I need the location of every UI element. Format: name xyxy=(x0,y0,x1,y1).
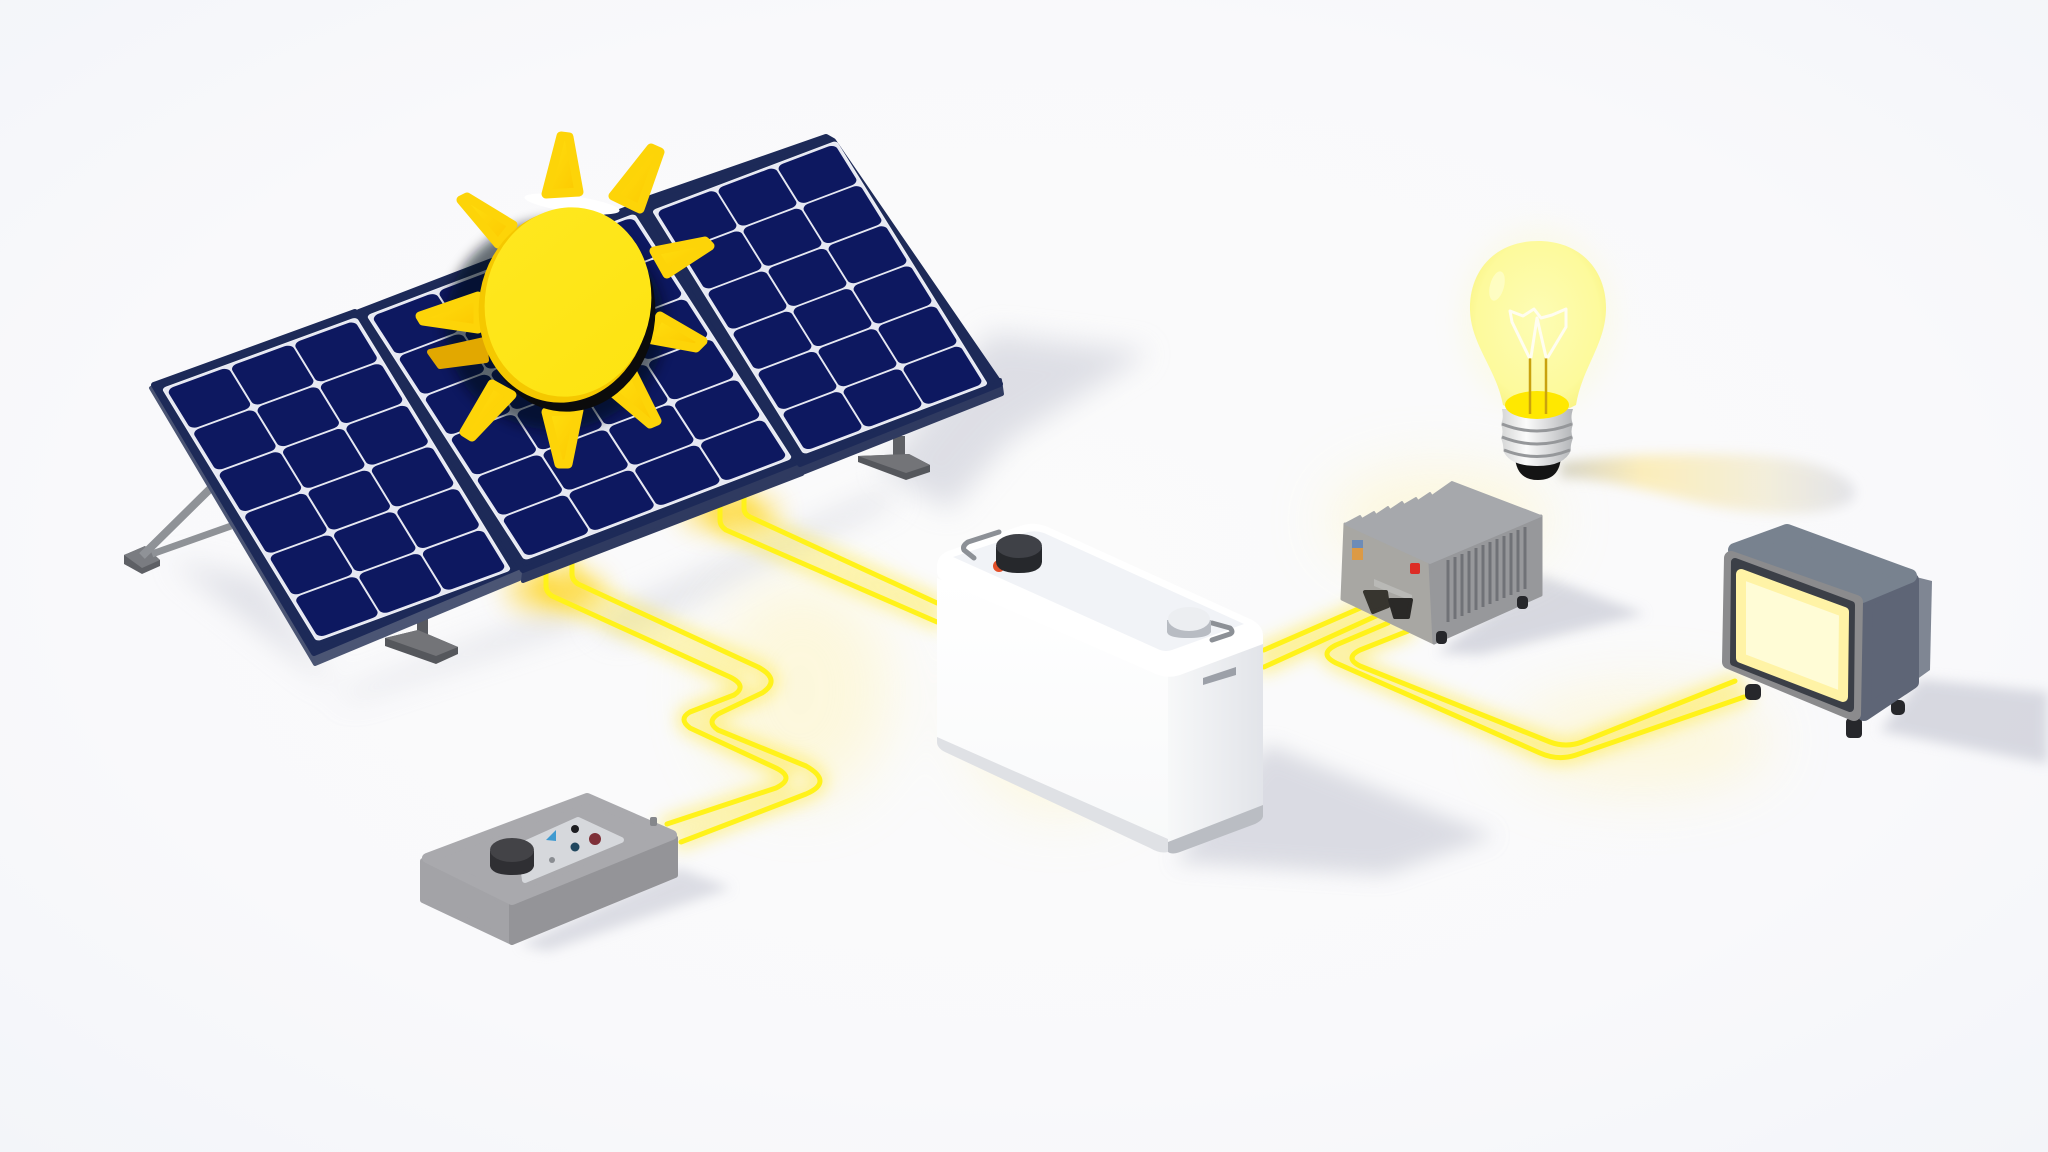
controller left face xyxy=(423,861,512,942)
bulb base glow xyxy=(1505,391,1569,419)
inverter top with serrated edge xyxy=(1345,482,1541,563)
control knob xyxy=(490,838,534,875)
filament xyxy=(1510,309,1566,357)
left stand strut xyxy=(124,486,231,574)
battery lid xyxy=(937,524,1263,677)
battery right face xyxy=(1168,643,1263,852)
sun disc body xyxy=(469,205,671,425)
television xyxy=(1729,531,1932,738)
solar array xyxy=(124,137,1002,664)
wire lines xyxy=(546,498,1744,842)
rear leg xyxy=(858,436,930,480)
glowing wires xyxy=(507,496,1744,842)
tv feet xyxy=(1745,684,1905,738)
panel: middle xyxy=(359,203,802,581)
inverter status light xyxy=(1410,563,1420,574)
ground shadows xyxy=(170,333,2048,951)
control faceplate xyxy=(520,820,621,880)
filament stems xyxy=(1530,357,1546,414)
bulb shadow xyxy=(1560,454,1855,513)
bulb tip xyxy=(1515,456,1561,480)
panel: right xyxy=(642,137,1002,474)
tv inner bezel xyxy=(1734,562,1851,708)
wire exit glows under panels xyxy=(507,496,778,608)
icon: sun xyxy=(420,136,710,464)
inverter vents xyxy=(1448,527,1525,622)
tv back bump xyxy=(1916,577,1932,680)
bulb glow xyxy=(1462,228,1614,412)
inverter feet xyxy=(1436,596,1528,644)
wire glow halo xyxy=(546,498,1744,842)
black terminal xyxy=(993,534,1042,573)
connector nub xyxy=(650,817,657,826)
battery left face xyxy=(937,578,1168,852)
charge controller xyxy=(423,798,675,942)
white terminal xyxy=(1167,607,1211,638)
sun shadow on panel xyxy=(445,220,665,430)
light bulb xyxy=(1462,228,1855,513)
bulb highlight xyxy=(1486,270,1508,302)
tv top xyxy=(1735,531,1910,596)
inverter xyxy=(1342,482,1541,644)
back ray reflection xyxy=(430,340,486,366)
warm light glows on the floor xyxy=(710,470,1770,810)
inverter badge xyxy=(1352,540,1363,560)
tv front bezel xyxy=(1729,558,1856,714)
sun disc face xyxy=(470,194,666,410)
front leg xyxy=(385,618,458,664)
inverter right face xyxy=(1430,516,1541,643)
battery base strip xyxy=(937,737,1263,854)
controller top face xyxy=(427,798,672,900)
bulb glass xyxy=(1470,241,1606,415)
sun top highlight xyxy=(523,189,621,219)
battery xyxy=(937,524,1263,854)
tv screen xyxy=(1741,574,1844,697)
panel: left xyxy=(151,312,524,664)
inverter left face xyxy=(1342,524,1434,643)
bulb screw base xyxy=(1501,409,1573,466)
indicator dots xyxy=(546,825,601,863)
battery handles xyxy=(964,532,1232,640)
battery slot xyxy=(1203,667,1236,685)
inverter connector xyxy=(1365,579,1412,617)
tv right side xyxy=(1864,580,1912,714)
sun rays xyxy=(420,136,710,464)
controller right face xyxy=(512,838,675,942)
